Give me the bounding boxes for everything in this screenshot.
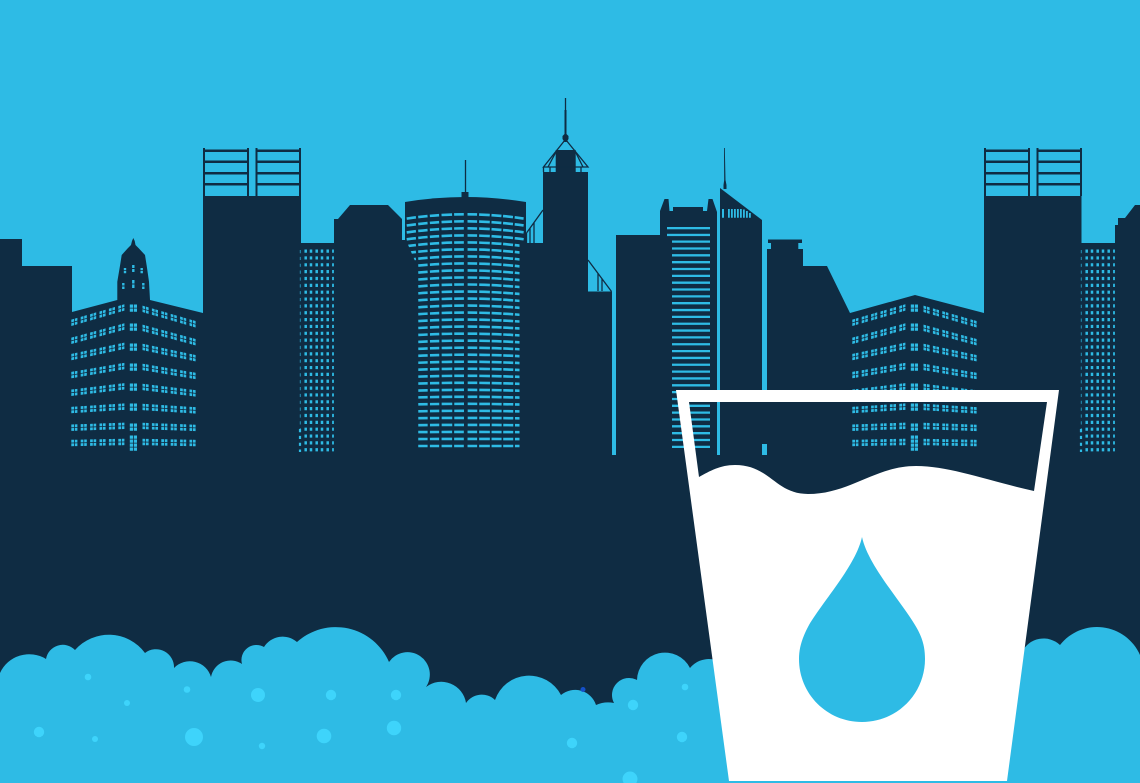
dark block masking the gap behind the glass <box>758 390 770 444</box>
building: rooftop racks, left tower <box>203 148 301 196</box>
building: striped tower <box>616 199 717 455</box>
icon: water drop <box>799 537 925 722</box>
building: wedge-roof tower <box>720 148 762 455</box>
ground block under the skyline <box>0 455 1140 783</box>
foam: left <box>0 627 730 783</box>
building: central spire tower <box>520 98 612 455</box>
building: rooftop racks, right tower <box>984 148 1082 196</box>
foam strip under the glass <box>720 775 1020 783</box>
windows: left flat-roof building <box>71 304 196 451</box>
dome windows <box>122 265 144 289</box>
building: left silhouette block with domed tower and rooftop tower <box>0 196 418 455</box>
building: round tower <box>405 160 526 455</box>
building: right silhouette block with flat-roof and rooftop towers <box>767 196 1140 455</box>
glass of water <box>676 390 1059 781</box>
foam: right <box>1000 627 1140 783</box>
windows: left dotted tower <box>300 250 333 452</box>
windows: right dotted tower <box>1081 250 1114 452</box>
foam bubbles <box>34 674 688 783</box>
windows: right flat-roof building <box>852 304 977 451</box>
small dark blue bubble <box>580 687 586 692</box>
